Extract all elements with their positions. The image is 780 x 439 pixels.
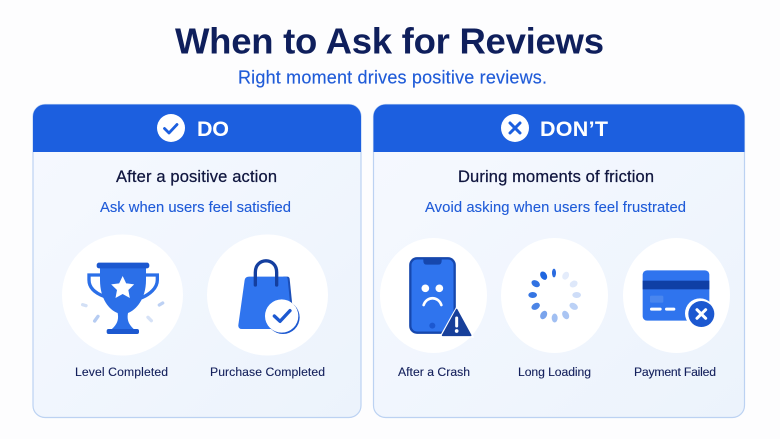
item label: Payment Failed (634, 365, 716, 379)
icon: check badge (157, 114, 185, 142)
icon: x badge (501, 114, 529, 142)
item label: Long Loading (518, 365, 591, 379)
title: When to Ask for Reviews (175, 20, 604, 62)
item: after a crash (380, 238, 487, 379)
item label: Purchase Completed (210, 365, 325, 379)
panel header (374, 104, 744, 152)
panel subheading: Ask when users feel satisfied (100, 200, 291, 216)
icon: trophy (83, 263, 163, 334)
panel background (374, 104, 744, 418)
item: level completed (62, 234, 183, 379)
panel: do (33, 104, 361, 418)
icon: sad phone with warning (410, 258, 474, 338)
icon: shopping bag (238, 261, 300, 334)
header label: don't: DON’T (540, 117, 608, 141)
item label: After a Crash (398, 365, 470, 379)
item label: Level Completed (75, 365, 168, 379)
icon: failed credit card (643, 270, 715, 328)
panel: don't (374, 104, 744, 418)
icon: loading spinner (528, 269, 581, 322)
item: payment failed (623, 238, 730, 379)
subtitle: Right moment drives positive reviews. (238, 68, 547, 88)
item: purchase completed (207, 234, 328, 379)
header label: do: DO (197, 117, 229, 141)
panel heading: During moments of friction (458, 168, 654, 186)
panel header (33, 104, 361, 152)
panel heading: After a positive action (116, 168, 277, 186)
panel background (33, 104, 361, 418)
item: long loading (501, 238, 608, 379)
panel subheading: Avoid asking when users feel frustrated (425, 200, 686, 216)
